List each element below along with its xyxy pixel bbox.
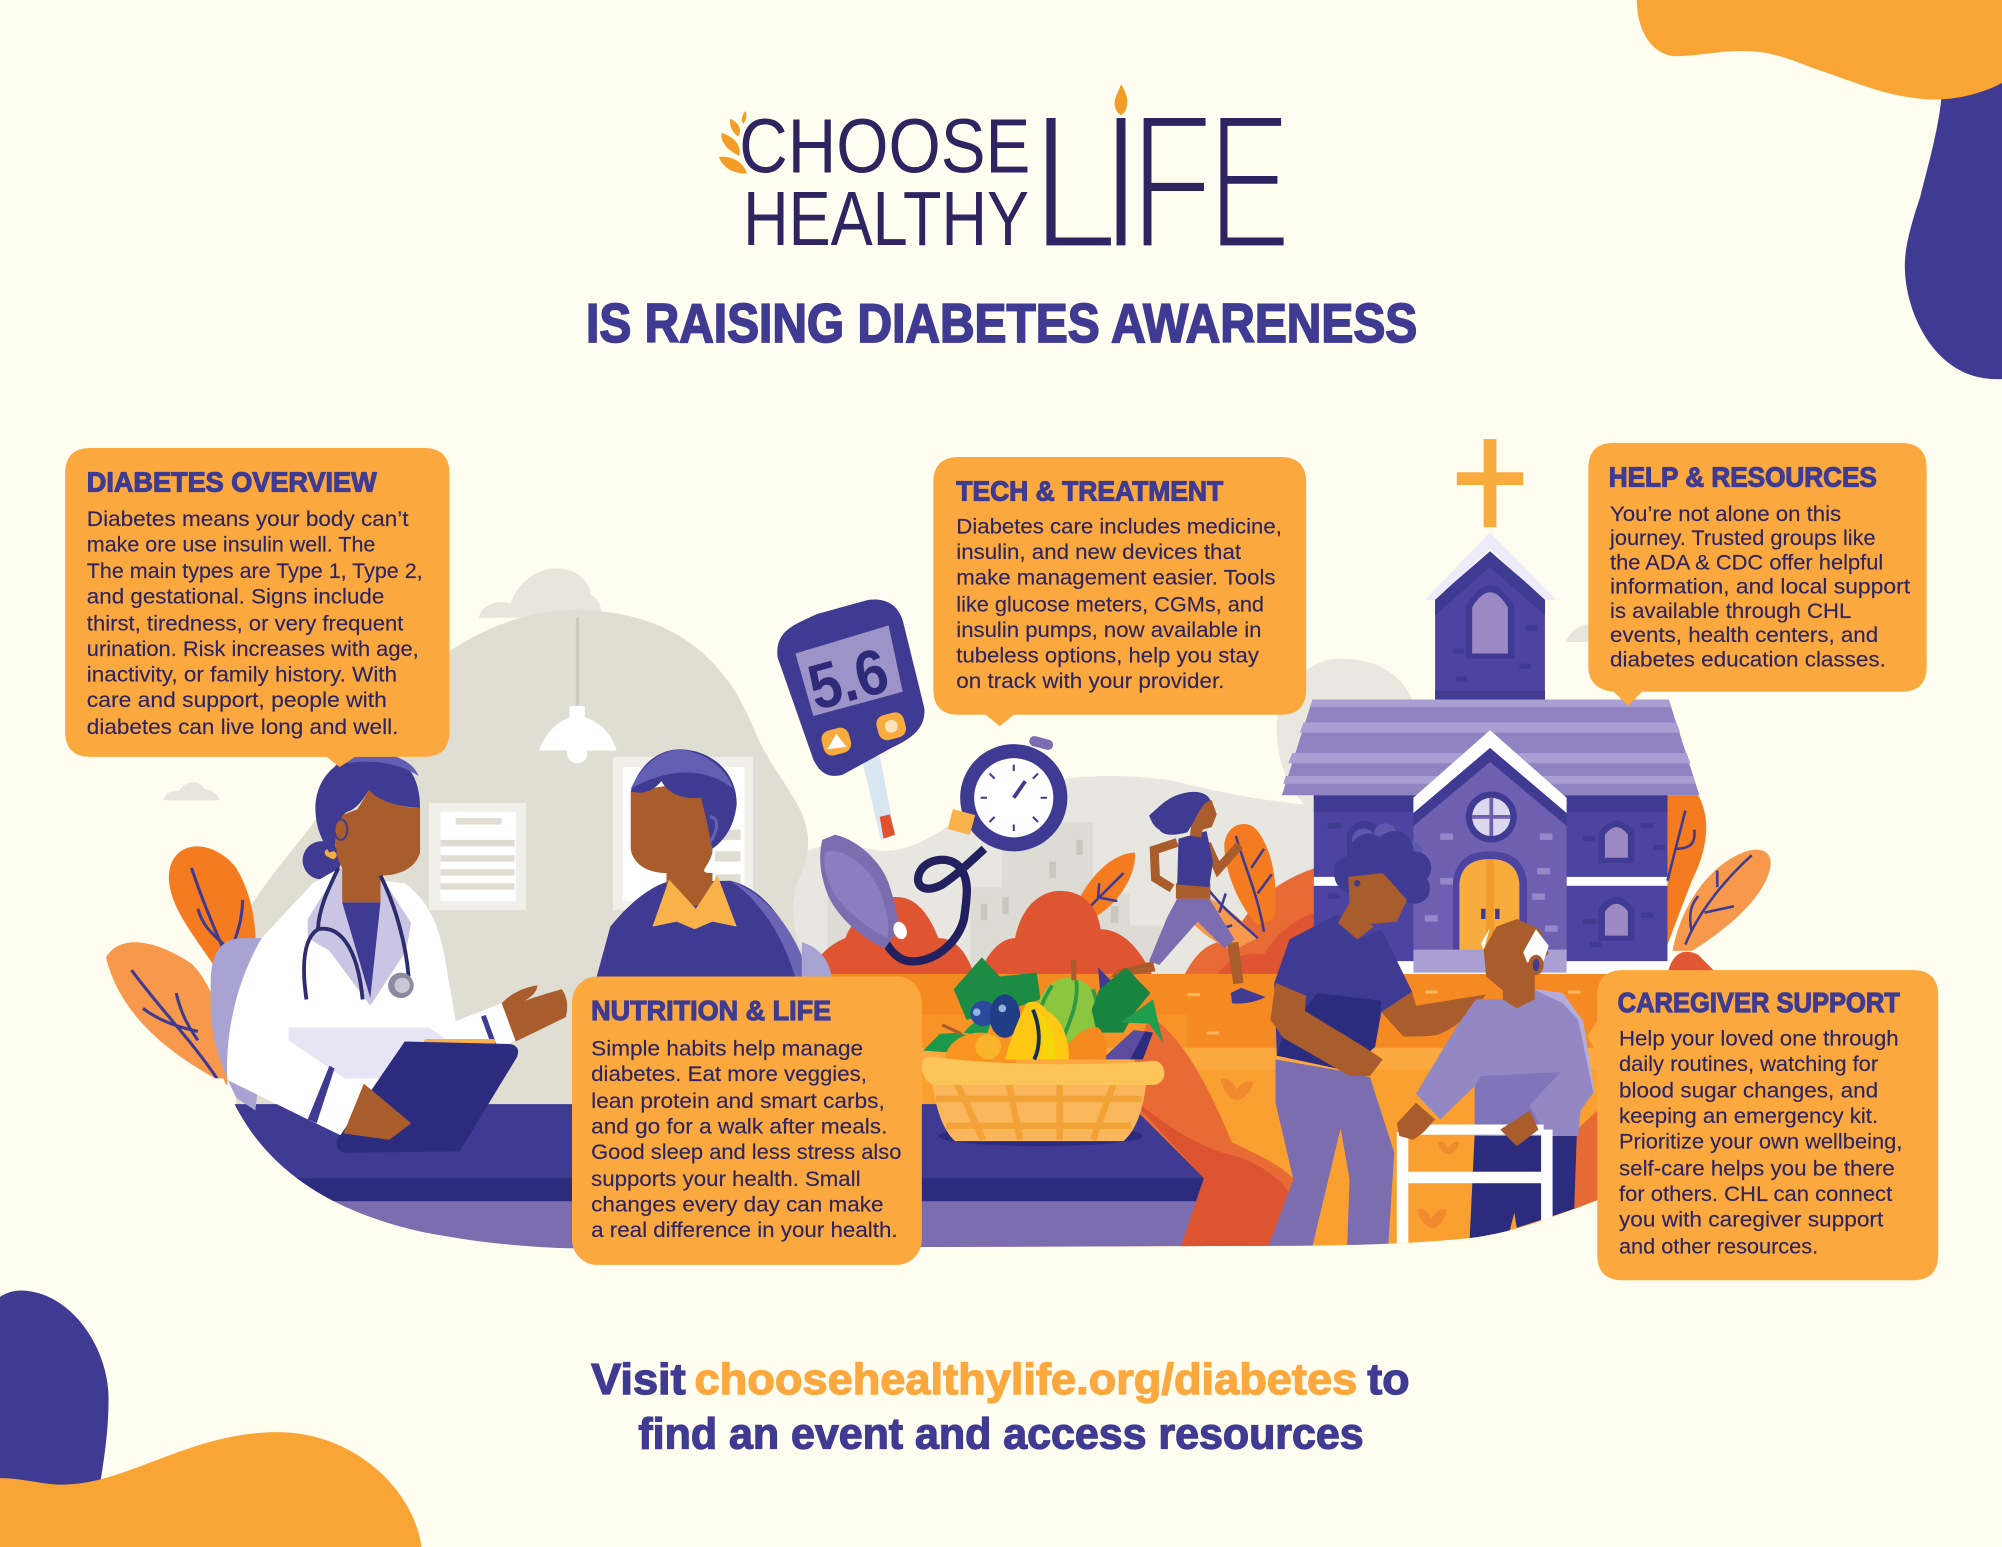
- basket shadow: [938, 1126, 1143, 1146]
- body text: the ADA & CDC offer helpful: [1610, 551, 1883, 574]
- runner head: [1190, 800, 1217, 837]
- orange ground: [804, 974, 1622, 1261]
- patient collar: [652, 876, 737, 929]
- yellow squash: [1005, 1002, 1069, 1059]
- doctor: [227, 753, 567, 1153]
- small cloud near church: [1565, 624, 1588, 642]
- church round window: [1466, 791, 1517, 842]
- body text: Diabetes means your body can’t: [87, 506, 409, 531]
- logo wordmark small: CHOOSE: [739, 104, 1030, 189]
- body text: is available through CHL: [1610, 600, 1851, 623]
- body text: a real difference in your health.: [591, 1217, 898, 1242]
- body text: urination. Risk increases with age,: [87, 636, 419, 661]
- meter reading: 5.6: [801, 634, 896, 724]
- small cloud left: [163, 782, 220, 800]
- body text: you with caregiver support: [1619, 1207, 1883, 1232]
- bubble: [933, 457, 1306, 726]
- elder pants: [1470, 1133, 1577, 1241]
- body text: [591, 1036, 901, 1242]
- body text: changes every day can make: [591, 1191, 884, 1216]
- elder head: [1484, 919, 1549, 1008]
- chair shadow right: [802, 942, 832, 976]
- meter buttons: [821, 728, 852, 756]
- footer call to action: choosehealthylife.org/diabetes: [695, 1356, 1357, 1404]
- footer call to action: [591, 1356, 1410, 1459]
- bulb: [820, 835, 898, 948]
- callout: nutrition and life: [572, 976, 922, 1265]
- right plants behind church: [1667, 795, 1771, 974]
- doctor ear: [335, 819, 347, 840]
- elder hands: [1397, 1103, 1435, 1140]
- steeple window: [1466, 585, 1514, 659]
- body text: Simple habits help manage: [591, 1036, 863, 1061]
- doctor coat: [227, 868, 516, 1136]
- meter screen: [795, 625, 903, 716]
- meter body: [777, 599, 924, 776]
- logo wordmark LIFE: [1030, 72, 1291, 291]
- room background wall: [236, 610, 817, 1110]
- berries: [970, 1001, 996, 1026]
- runner legs: [1227, 942, 1244, 984]
- runner hair: [1149, 792, 1210, 835]
- doctor hair bun: [303, 841, 341, 879]
- logo wordmark LIFE: F: [1130, 72, 1213, 291]
- body text: diabetes education classes.: [1610, 648, 1886, 671]
- title: DIABETES OVERVIEW: [87, 466, 377, 497]
- title: TECH & TREATMENT: [956, 475, 1223, 506]
- caregiver face: [1338, 873, 1407, 939]
- body text: and other resources.: [1619, 1233, 1818, 1258]
- elder with walker: [1397, 919, 1595, 1250]
- body text: insulin pumps, now available in: [956, 617, 1261, 642]
- city buildings: [827, 822, 1162, 976]
- body text: Diabetes care includes medicine,: [956, 514, 1282, 539]
- top right corner blobs: [1637, 0, 2002, 379]
- bubble: [65, 448, 449, 767]
- logo wordmark LIFE: L: [1030, 72, 1119, 290]
- greens left: [954, 957, 1041, 1020]
- stopwatch: [1028, 735, 1054, 751]
- church gable: [1413, 730, 1567, 965]
- walker: [1397, 1125, 1553, 1250]
- doctor collar: [308, 868, 411, 1006]
- church side windows: [1347, 821, 1634, 941]
- church door: [1453, 851, 1527, 951]
- glucose meter: [777, 599, 924, 840]
- church walls: [1314, 795, 1667, 965]
- melon: [1035, 978, 1102, 1059]
- callout: help and resources: [1588, 443, 1927, 706]
- bottom left corner blobs: [0, 1290, 421, 1547]
- heading: IS RAISING DIABETES AWARENESS: [586, 292, 1417, 354]
- body text: make ore use insulin well. The: [87, 531, 375, 556]
- body text: Good sleep and less stress also: [591, 1139, 901, 1164]
- doctor clipboard: [424, 1039, 496, 1044]
- body text: information, and local support: [1610, 576, 1910, 599]
- runner shoes: [1231, 988, 1265, 1004]
- logo: Choose Healthy Life: HEALTHY: [743, 177, 1029, 262]
- title: NUTRITION & LIFE: [591, 995, 831, 1026]
- body text: [87, 506, 423, 739]
- church cross: [1457, 439, 1523, 527]
- patient hair: [631, 749, 737, 849]
- eggplant: [1102, 1030, 1153, 1059]
- bubble: [572, 976, 922, 1265]
- basket of produce: [922, 957, 1164, 1146]
- basket rim: [922, 1057, 1164, 1085]
- footer call to action: to: [1367, 1356, 1410, 1404]
- church bricks: [1328, 625, 1665, 947]
- runner arms: [1154, 842, 1177, 888]
- church main roof: [1282, 699, 1699, 795]
- caregiver shirt: [1274, 914, 1412, 1071]
- oranges: [945, 1033, 1016, 1089]
- elder sweater: [1536, 989, 1595, 1098]
- body text: inactivity, or family history. With: [87, 662, 397, 687]
- bubble: [1588, 443, 1927, 706]
- body text: blood sugar changes, and: [1619, 1078, 1878, 1103]
- church gable bricks: [1425, 833, 1558, 932]
- elder white hair: [1523, 929, 1549, 962]
- wall poster: [429, 803, 526, 910]
- body text: [1609, 503, 1910, 671]
- body text: self-care helps you be there: [1619, 1156, 1895, 1181]
- title: CAREGIVER SUPPORT: [1618, 987, 1900, 1018]
- patient: [595, 749, 811, 983]
- table base: [234, 1104, 1204, 1248]
- body text: like glucose meters, CGMs, and: [956, 591, 1264, 616]
- body text: tubeless options, help you stay: [956, 642, 1259, 667]
- footer call to action: find an event and access resources: [638, 1411, 1364, 1459]
- doctor face: [336, 790, 420, 902]
- body text: events, health centers, and: [1610, 624, 1878, 647]
- logo wheat icon: [719, 111, 747, 174]
- body text: insulin, and new devices that: [956, 539, 1241, 564]
- patient sweater: [596, 880, 795, 977]
- bushes: [822, 852, 1314, 974]
- runner background leaves: [1176, 824, 1276, 951]
- meter strip: [862, 756, 895, 840]
- illustration scene: [106, 439, 1771, 1264]
- caregiver pants: [1267, 1059, 1394, 1251]
- caregiver: [1267, 823, 1486, 1251]
- logo flame: [1115, 84, 1127, 115]
- left plants: [106, 846, 256, 1085]
- body text: You’re not alone on this: [1610, 503, 1841, 526]
- body text: diabetes. Eat more veggies,: [591, 1061, 867, 1086]
- caregiver ear: [1350, 877, 1362, 890]
- runner: [1098, 792, 1265, 1004]
- church step: [1314, 961, 1667, 974]
- red hill: [1134, 1022, 1294, 1246]
- doctor chair: [210, 938, 262, 1110]
- logo wordmark LIFE: E: [1208, 73, 1291, 291]
- footer call to action: Visit: [591, 1356, 686, 1404]
- logo: Choose Healthy Life: [719, 72, 1291, 291]
- caregiver hair: [1352, 823, 1422, 864]
- doctor stethoscope: [304, 868, 409, 999]
- body text: on track with your provider.: [956, 668, 1224, 693]
- body text: and gestational. Signs include: [87, 584, 384, 609]
- tube: [886, 849, 984, 961]
- body text: supports your health. Small: [591, 1166, 861, 1191]
- church steeple: [1435, 551, 1545, 699]
- basket body: [932, 1082, 1147, 1141]
- callout: tech and treatment: [933, 457, 1306, 726]
- body text: for others. CHL can connect: [1619, 1181, 1892, 1206]
- clouds and back hills: [479, 568, 1417, 983]
- callout: diabetes overview: [65, 448, 449, 767]
- body text: lean protein and smart carbs,: [591, 1088, 885, 1113]
- caregiver arms: [1381, 992, 1486, 1036]
- doctor left hand: [502, 985, 567, 1042]
- body text: Help your loved one through: [1619, 1025, 1899, 1050]
- greens right: [1092, 968, 1150, 1033]
- body text: The main types are Type 1, Type 2,: [87, 558, 423, 583]
- body text: Prioritize your own wellbeing,: [1619, 1129, 1902, 1154]
- body text: make management easier. Tools: [956, 565, 1276, 590]
- patient face: [631, 779, 712, 909]
- body text: [1619, 1025, 1902, 1258]
- runner top: [1177, 831, 1213, 887]
- body text: [956, 514, 1282, 693]
- body text: thirst, tiredness, or very frequent: [87, 611, 403, 636]
- body text: and go for a walk after meals.: [591, 1113, 887, 1138]
- body text: care and support, people with: [87, 687, 387, 712]
- bubble: [1587, 970, 1938, 1280]
- logo wordmark LIFE: I: [1099, 73, 1143, 291]
- title: HELP & RESOURCES: [1609, 461, 1877, 492]
- church: [1282, 439, 1699, 974]
- patient wall poster: [613, 757, 753, 910]
- body text: keeping an emergency kit.: [1619, 1103, 1878, 1128]
- blood pressure cuff and tube: [820, 735, 1067, 961]
- body text: journey. Trusted groups like: [1609, 527, 1876, 550]
- body text: daily routines, watching for: [1619, 1051, 1878, 1076]
- pendant lamp: [539, 618, 617, 763]
- doctor hair: [315, 753, 420, 853]
- callout: caregiver support: [1587, 970, 1938, 1280]
- body text: diabetes can live long and well.: [87, 714, 398, 739]
- runner midriff: [1176, 883, 1210, 899]
- patient ear: [710, 817, 717, 842]
- doctor right hand: [343, 1084, 411, 1140]
